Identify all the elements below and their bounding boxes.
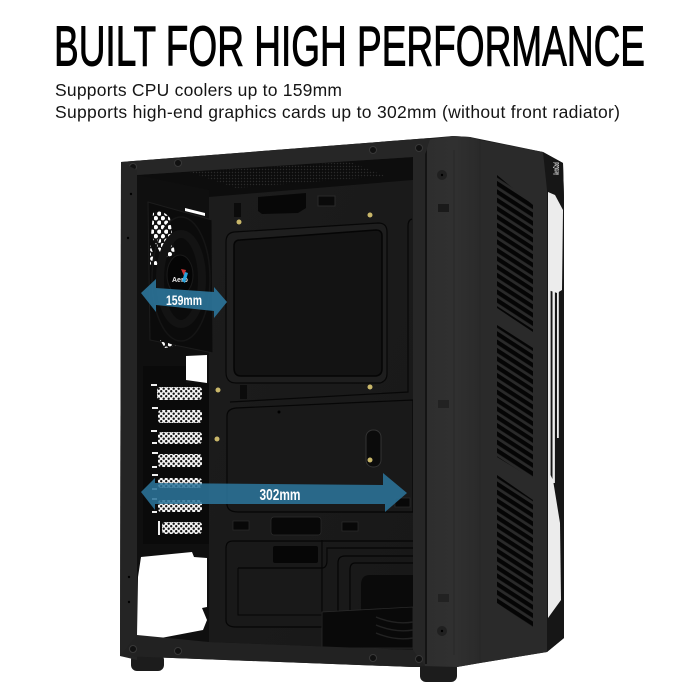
motherboard tray (209, 180, 413, 650)
brass standoffs (214, 212, 372, 442)
case body silhouette (120, 136, 564, 667)
arrow: 302mm graphics card clearance: 302mm (260, 487, 300, 504)
subtitle text block (55, 80, 620, 122)
white light bar (185, 208, 205, 216)
rear wall (137, 175, 209, 642)
front panel side (425, 136, 564, 667)
right frame column (413, 139, 425, 666)
PCI slot vents (157, 387, 202, 534)
ceiling mesh (190, 162, 385, 188)
subtitle text block: Supports CPU coolers up to 159mm (55, 80, 342, 100)
PCI slot column (143, 366, 209, 544)
arrow: 302mm graphics card clearance (141, 473, 407, 512)
arrow: 159mm CPU cooler clearance (141, 279, 227, 318)
fan grill opening (151, 211, 175, 258)
rear white gap (186, 355, 207, 383)
lower tray panel (227, 400, 413, 512)
icon: case feet (131, 654, 457, 682)
top frame band (121, 138, 430, 176)
bottom frame band (120, 635, 425, 667)
power supply (322, 607, 413, 648)
front panel light strip (548, 192, 563, 618)
tray cut-outs row (233, 498, 410, 535)
fan hub (167, 255, 193, 295)
PC case illustration (120, 136, 564, 682)
rear fan (148, 202, 213, 353)
bottom white opening (137, 552, 207, 642)
left frame column (120, 162, 137, 660)
subtitle text block: Supports high-end graphics cards up to 302mm (without front radiator) (55, 102, 620, 122)
arrow: 159mm CPU cooler clearance: 159mm (166, 292, 202, 308)
CPU cut-out recess (226, 223, 387, 383)
slot tabs (151, 384, 160, 535)
cable grommet (366, 430, 381, 467)
PSU shroud (226, 540, 413, 627)
PC case illustration: AeroCool (552, 162, 561, 175)
rear fan: Aero (172, 277, 188, 284)
interior opening (137, 157, 413, 651)
vents (497, 175, 533, 628)
